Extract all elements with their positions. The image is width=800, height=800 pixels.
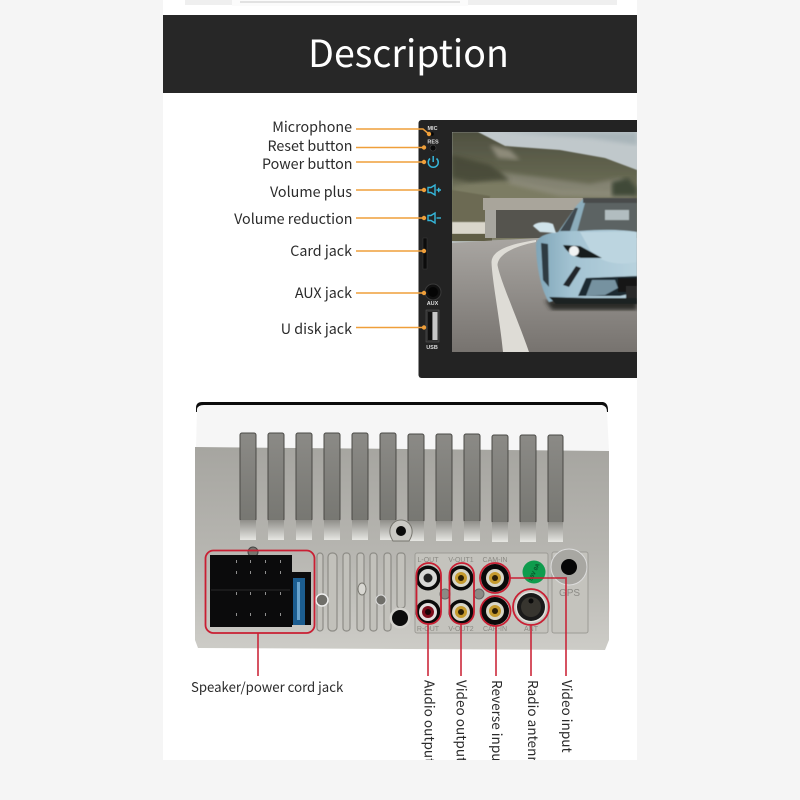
- rotated port labels: [422, 680, 573, 760]
- speaker highlight: [206, 550, 314, 676]
- antenna socket: [516, 592, 546, 622]
- microphone label: Microphone: [272, 116, 352, 137]
- usb port: [426, 310, 439, 351]
- reset hole: [427, 140, 439, 151]
- vent fins: [317, 553, 405, 631]
- panel: rear of head unit: [195, 402, 609, 650]
- microphone hole: MIC: [427, 126, 438, 132]
- aux jack: [425, 284, 441, 307]
- microphone hole: [427, 126, 438, 136]
- volume plus label: [270, 181, 426, 202]
- power label: [262, 153, 426, 174]
- rca port panel: L-OUT: [418, 557, 439, 564]
- audio output label: Audio output: [420, 680, 440, 763]
- tunnel: [483, 198, 583, 210]
- car: [533, 198, 637, 310]
- card jack label: [290, 240, 426, 261]
- road line: [492, 240, 536, 352]
- u disk label: U disk jack: [281, 318, 352, 339]
- aux jack: AUX: [427, 301, 439, 307]
- video input line: [510, 578, 566, 676]
- header band: [163, 15, 637, 93]
- rca port panel: V-OUT1: [448, 557, 474, 564]
- road: [452, 238, 637, 352]
- microphone label: [272, 116, 431, 137]
- rca port panel: ANT: [524, 626, 539, 633]
- card jack label: Card jack: [290, 240, 352, 261]
- video output highlight: [450, 563, 474, 676]
- page panel: [163, 0, 637, 760]
- aux jack label: [295, 282, 426, 303]
- gps panel: GPS: [559, 588, 580, 599]
- rca port panel: V-OUT2: [448, 626, 474, 633]
- round rear knob: [390, 608, 410, 628]
- icon: volume minus: [428, 213, 441, 223]
- speaker label: Speaker/power cord jack: [191, 677, 344, 696]
- touch screen photo: [452, 132, 637, 352]
- reset hole: RES: [427, 140, 439, 146]
- video output label: Video output: [452, 680, 472, 762]
- icon: power: [428, 156, 438, 167]
- green sticker: 50V 0A: [528, 563, 542, 582]
- usb port: USB: [426, 345, 438, 351]
- radio antenna label: Radio antenna: [524, 680, 544, 772]
- small screws: [248, 547, 386, 606]
- cooling slots: [240, 433, 563, 542]
- aux jack label: AUX jack: [295, 282, 352, 303]
- panel: front of head unit: [418, 120, 648, 378]
- video input label: Video input: [558, 680, 578, 753]
- reverse input highlight: [480, 563, 510, 676]
- volume reduction label: [234, 208, 426, 229]
- callouts: rear red highlights: [206, 550, 566, 676]
- rca port panel: R-OUT: [417, 626, 440, 633]
- card slot: [423, 238, 427, 269]
- audio jacks: [416, 566, 440, 624]
- rca port panel: CAM-IN: [483, 557, 507, 564]
- green sticker: [522, 560, 546, 584]
- speaker and power connector: [210, 555, 311, 627]
- volume plus label: Volume plus: [270, 181, 352, 202]
- volume reduction label: Volume reduction: [234, 208, 352, 229]
- callouts: front labels: [234, 116, 431, 339]
- reset label: [267, 135, 426, 156]
- power label: Power button: [262, 153, 352, 174]
- title: Description: [308, 23, 509, 78]
- radio antenna highlight: [513, 589, 549, 676]
- reverse jacks: [481, 564, 509, 625]
- reset label: Reset button: [267, 135, 352, 156]
- u disk label: [281, 318, 426, 339]
- screw hole: [390, 520, 412, 541]
- rca port panel: [415, 553, 548, 633]
- video jacks: [448, 566, 474, 624]
- reverse input label: Reverse input: [488, 680, 508, 767]
- hillside: [452, 132, 637, 240]
- rca port panel: CAR-IN: [483, 626, 507, 633]
- icon: volume plus: [428, 185, 441, 195]
- screws between jacks: [440, 589, 484, 599]
- gps panel: [551, 549, 588, 633]
- top cropped strip: [185, 0, 617, 6]
- audio highlight: [416, 563, 441, 676]
